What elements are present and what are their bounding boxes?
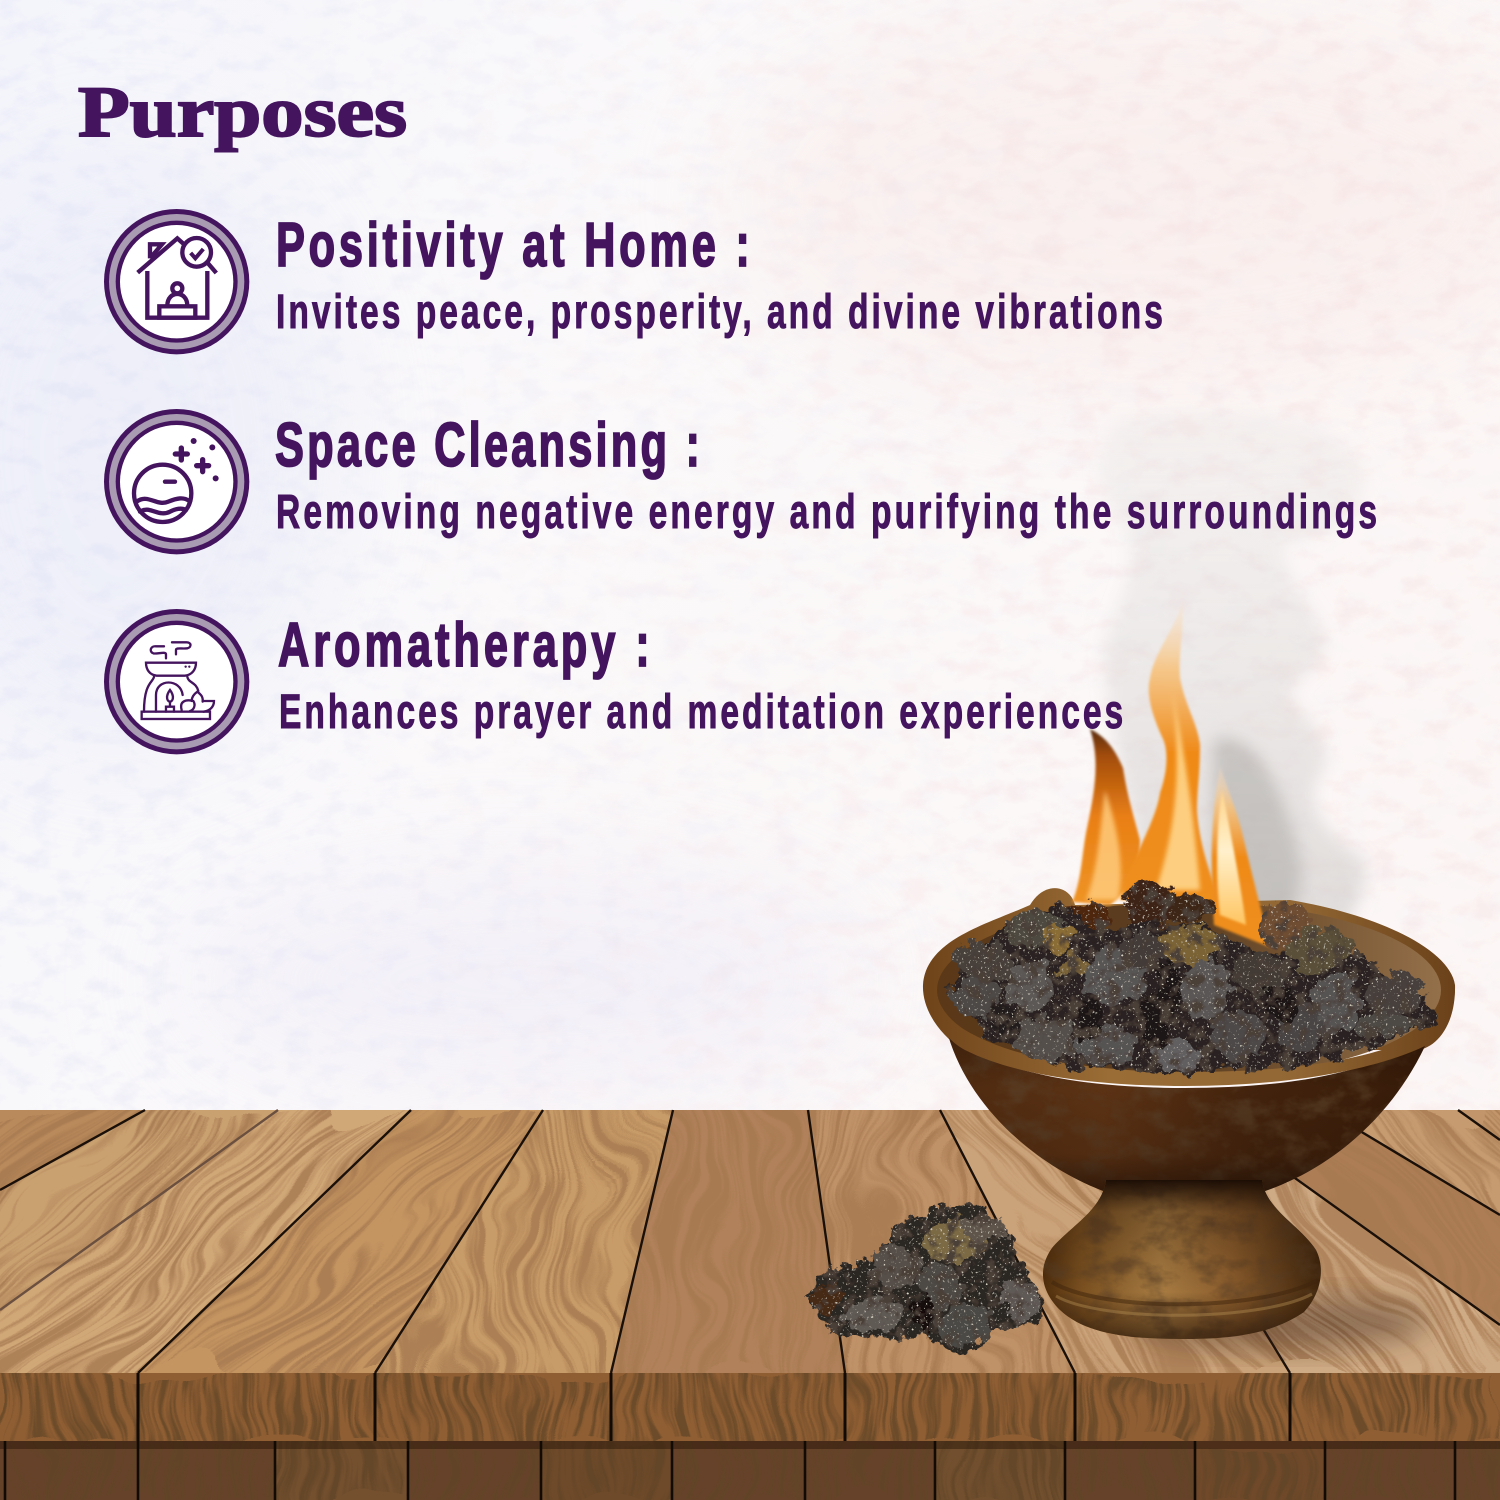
table top planks [0, 1109, 1500, 1373]
heading: Positivity at Home : [276, 212, 750, 280]
panel: space cleansing [104, 409, 1377, 554]
smoke rising from the flames [1099, 411, 1366, 930]
description: Enhances prayer and meditation experiences [279, 684, 1123, 738]
burning resin pieces [1070, 879, 1313, 949]
heading: Space Cleansing : [275, 412, 700, 480]
wooden table [0, 1109, 1500, 1500]
bowl pedestal foot [1035, 1180, 1330, 1340]
censer with burning resin [805, 600, 1455, 1356]
bowl interior and rim [923, 888, 1455, 1078]
panel: aromatherapy [104, 609, 1123, 754]
heading: Aromatherapy : [278, 612, 650, 680]
table front edge [0, 1373, 1500, 1441]
panel: positivity at home [104, 209, 1163, 354]
icon: house with check mark [104, 209, 249, 354]
table lower planks [0, 1441, 1500, 1500]
bowl body [948, 1038, 1425, 1191]
flames [1072, 600, 1272, 948]
title: Purposes [78, 72, 407, 152]
resin heap in the bowl [948, 905, 1440, 1074]
icon: aroma oil burner [104, 609, 249, 754]
description: Removing negative energy and purifying the surroundings [276, 484, 1377, 538]
bowl front lip [923, 985, 1455, 1086]
description: Invites peace, prosperity, and divine vibrations [276, 284, 1163, 338]
textured wall background [0, 0, 1500, 1112]
loose resin lump on the table [805, 1203, 1045, 1356]
contact shadow [1130, 1294, 1430, 1350]
icon: purifying orb with sparkles [104, 409, 249, 554]
